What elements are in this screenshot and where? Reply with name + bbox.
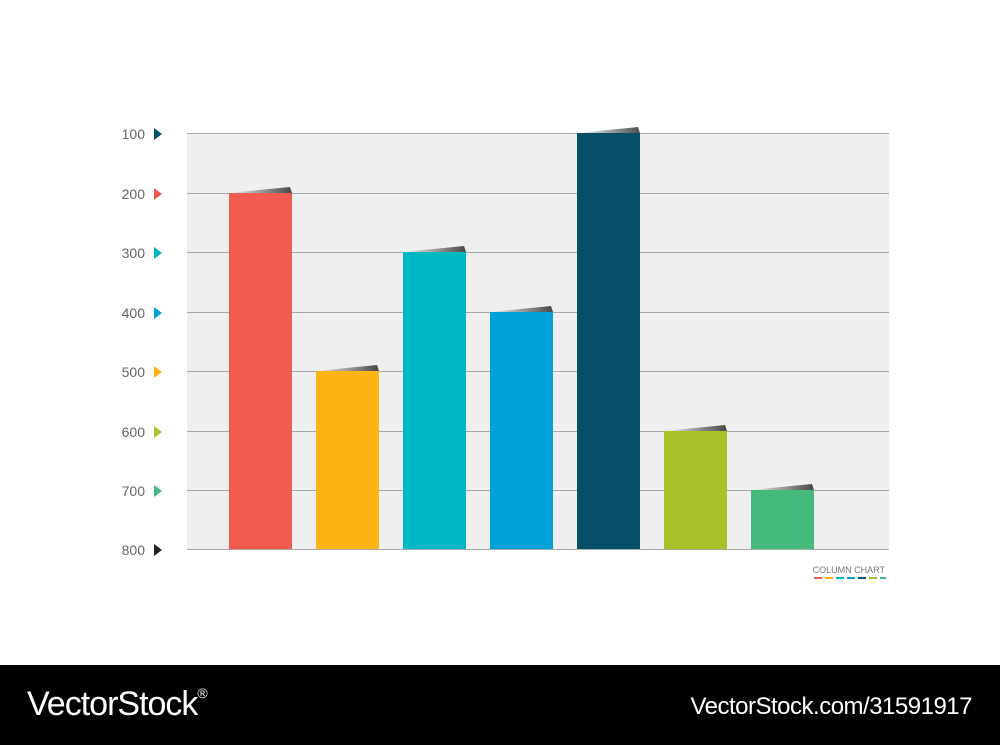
footer bar bbox=[0, 665, 1000, 745]
y-axis labels: 700 bbox=[122, 483, 145, 499]
y-axis labels bbox=[122, 126, 145, 558]
bars bbox=[229, 127, 814, 549]
y-axis arrow markers bbox=[154, 128, 162, 556]
legend caption: COLUMN CHART bbox=[813, 565, 885, 575]
footer brand: VectorStock® bbox=[27, 685, 207, 723]
y-axis labels: 800 bbox=[122, 542, 145, 558]
footer id: VectorStock.com/31591917 bbox=[690, 693, 972, 720]
y-axis labels: 100 bbox=[122, 126, 145, 142]
y-axis labels: 300 bbox=[122, 245, 145, 261]
y-axis labels: 500 bbox=[122, 364, 145, 380]
y-axis labels: 200 bbox=[122, 186, 145, 202]
y-axis labels: 400 bbox=[122, 305, 145, 321]
plot background bbox=[187, 133, 889, 549]
y-axis labels: 600 bbox=[122, 424, 145, 440]
